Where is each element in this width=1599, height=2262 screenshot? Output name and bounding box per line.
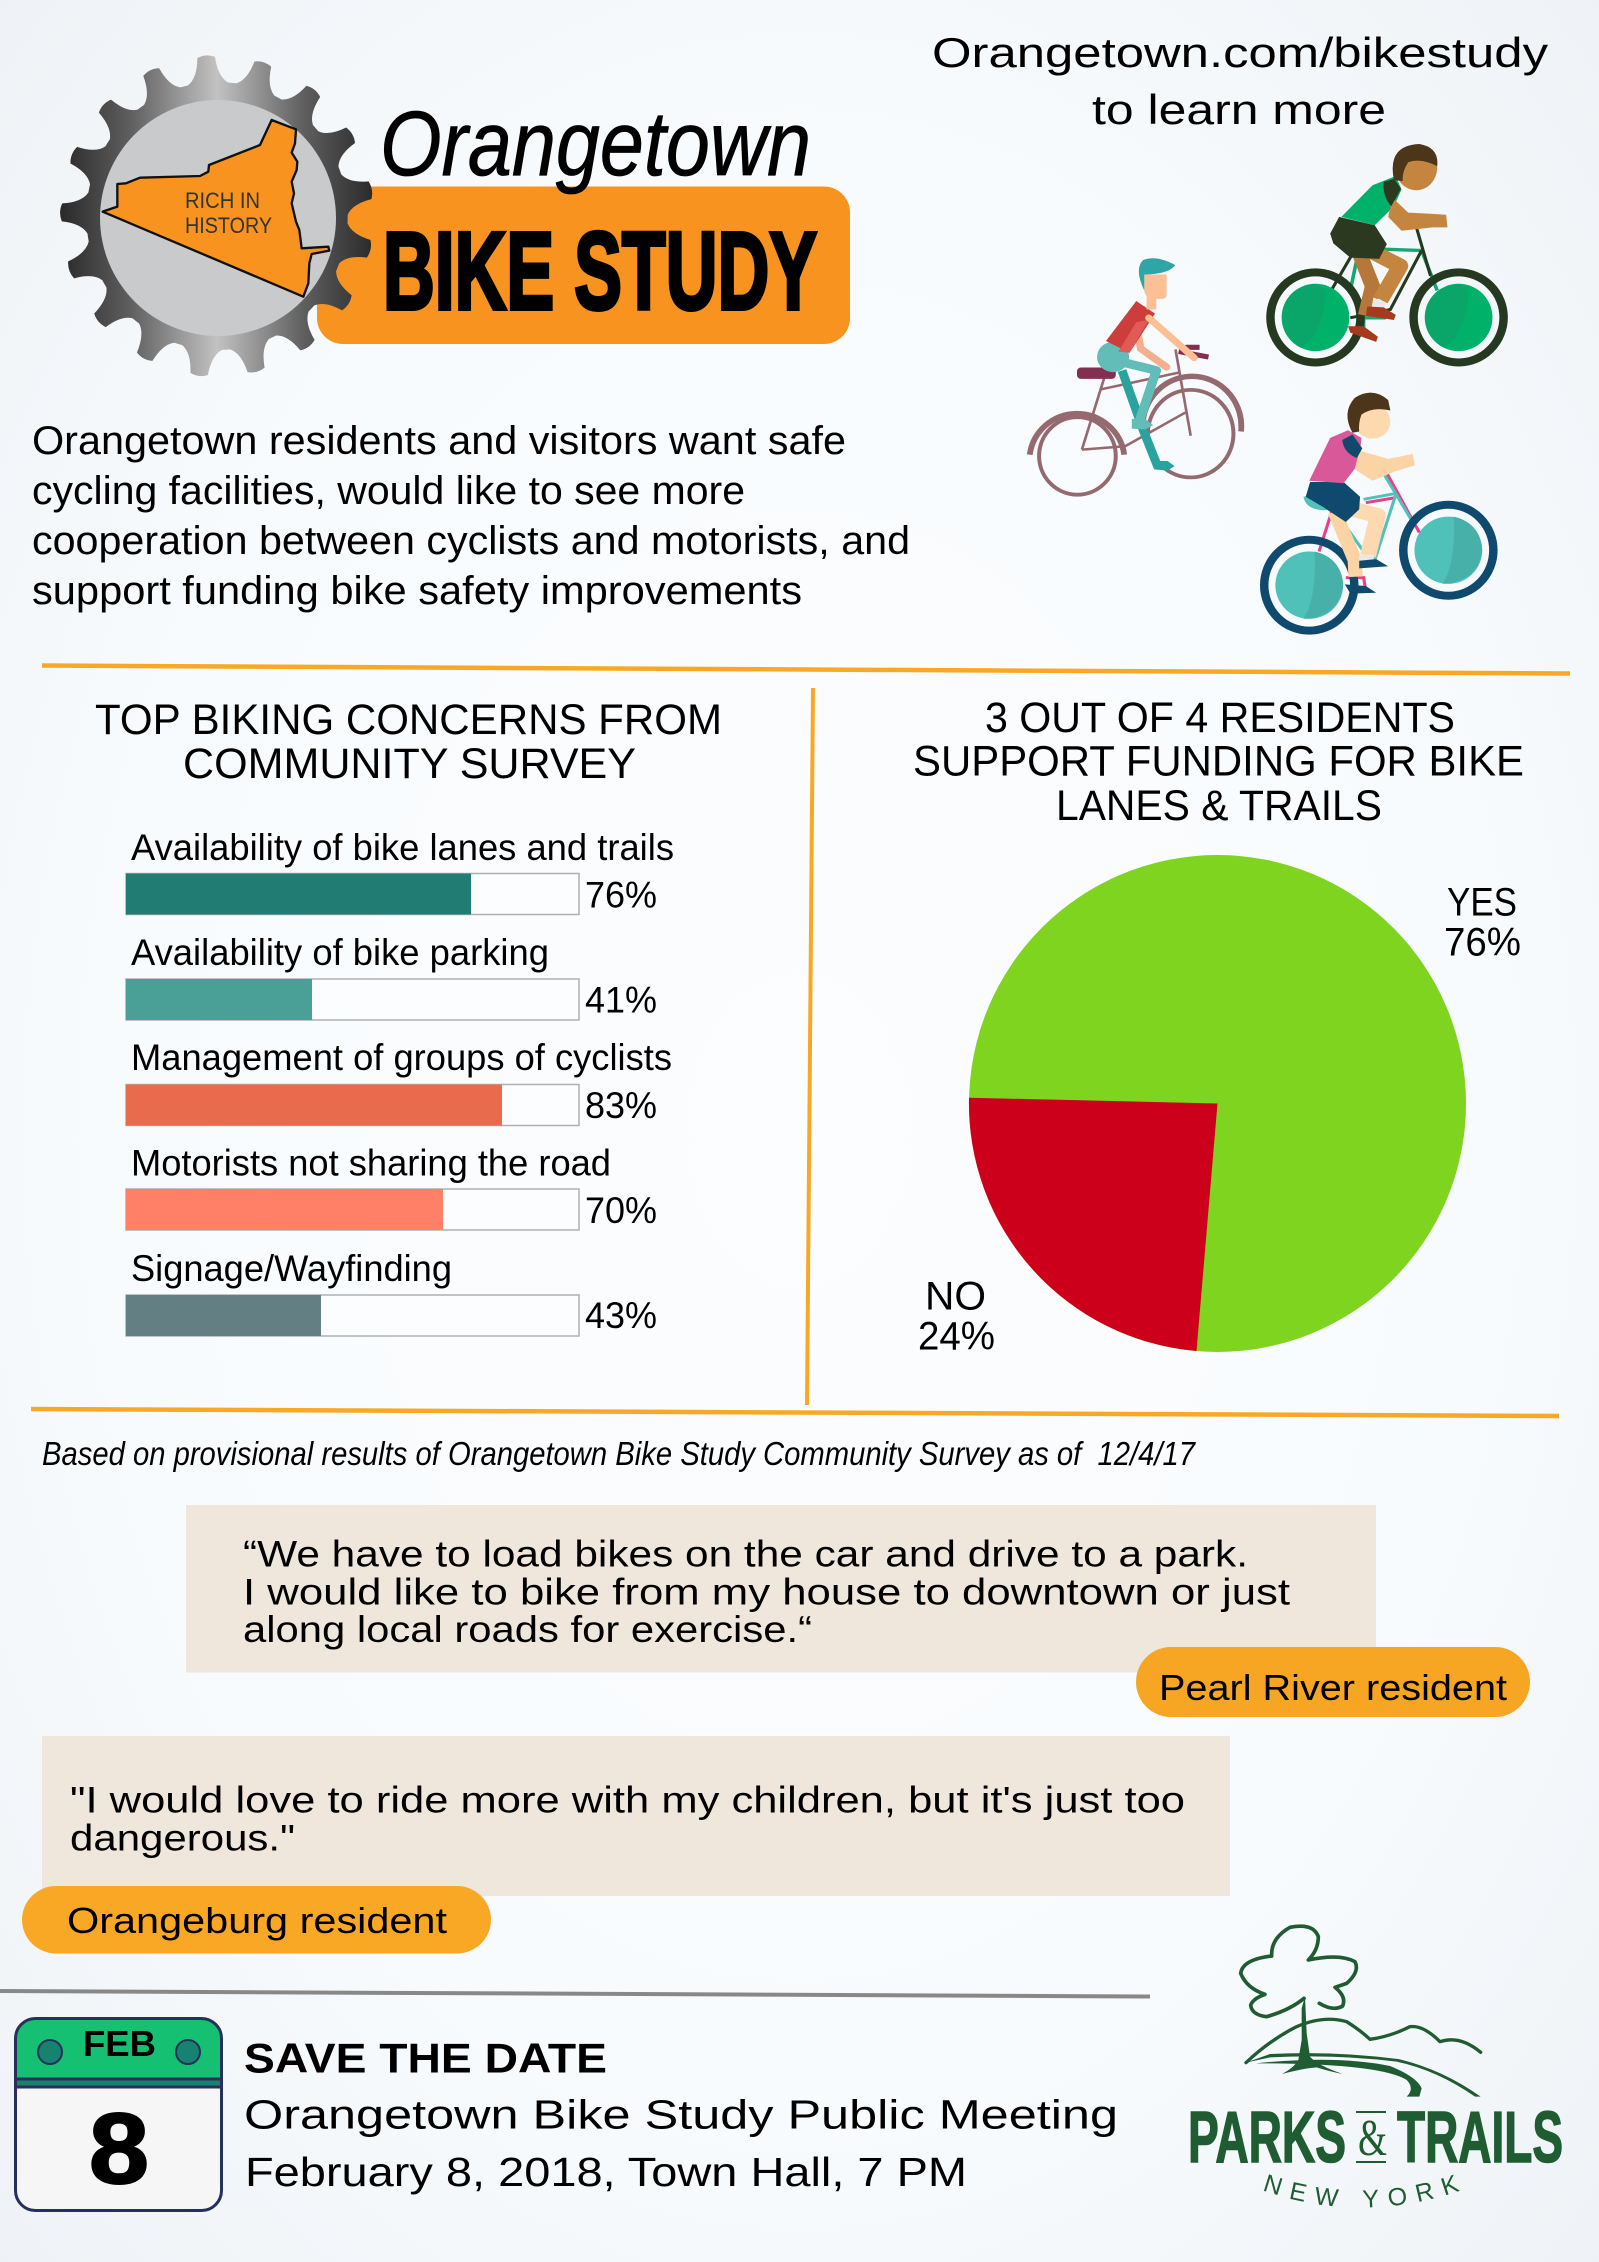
map label: HISTORY — [185, 213, 272, 238]
heading: 3 out of 4 residents: LANES & TRAILS — [1056, 782, 1382, 830]
wordmark: & — [1358, 2110, 1387, 2167]
pie label: no: NO — [925, 1274, 986, 1318]
icon: cyclist in pink shirt — [1264, 393, 1493, 631]
heading: top biking concerns — [95, 696, 722, 788]
attribution pill: Pearl River resident — [1159, 1667, 1507, 1708]
pie label: no — [918, 1274, 995, 1358]
save the date text: Orangetown Bike Study Public Meeting — [244, 2092, 1118, 2138]
panel: biking concerns — [95, 696, 722, 1336]
bar: bike lanes and trails 76%: 76% — [585, 874, 657, 916]
bar: signage 43%: 43% — [585, 1295, 657, 1336]
footnote: Based on provisional results of Orangetown Bike Study Community Survey as of 12/4/17 — [42, 1435, 1196, 1472]
banner heading: BIKE STUDY: BIKE STUDY — [383, 210, 817, 333]
pie chart — [969, 855, 1466, 1352]
link text: Orangetown.com/bikestudy — [932, 29, 1548, 76]
attribution pill: Orangeburg resident — [67, 1900, 447, 1941]
heading: 3 out of 4 residents — [913, 694, 1524, 830]
quote: Pearl River resident — [186, 1505, 1530, 1717]
logo title: Orangetown: Orangetown — [380, 93, 811, 195]
bar: signage 43% — [126, 1248, 657, 1336]
attribution pill — [22, 1886, 491, 1954]
icon: cyclist in red shirt — [1030, 258, 1241, 495]
wordmark: PARKS — [1188, 2098, 1346, 2178]
heading: top biking concerns: COMMUNITY SURVEY — [183, 740, 636, 788]
panel: funding support — [913, 694, 1524, 1358]
heading: 3 out of 4 residents: SUPPORT FUNDING FOR BIKE — [913, 738, 1524, 786]
bar: groups of cyclists 83%: Management of groups of cyclists — [131, 1037, 672, 1078]
icon: calendar February 8: FEB — [83, 2023, 156, 2064]
intro text: Orangetown residents and visitors want safe — [32, 419, 846, 463]
link text: to learn more — [1092, 86, 1386, 133]
cyclists illustration — [1030, 144, 1504, 631]
icon: New York state map — [103, 120, 329, 297]
save the date text: February 8, 2018, Town Hall, 7 PM — [245, 2149, 967, 2195]
quote: Pearl River resident: along local roads for exercise.“ — [243, 1609, 812, 1650]
quote: Orangeburg resident: dangerous." — [70, 1818, 295, 1858]
attribution pill — [1136, 1647, 1530, 1717]
orange banner — [317, 186, 850, 344]
quote: Pearl River resident: I would like to bike from my house to downtown or just — [243, 1572, 1291, 1612]
icon: tree and trail — [1241, 1926, 1481, 2097]
pie label: yes — [1444, 880, 1521, 964]
heading: top biking concerns: TOP BIKING CONCERNS FROM — [95, 696, 722, 744]
wordmark: NEW YORK — [1264, 2174, 1460, 2208]
intro text: support funding bike safety improvements — [32, 569, 802, 613]
pie label: yes: YES — [1447, 880, 1517, 924]
quote: Pearl River resident: “We have to load bikes on the car and drive to a park. — [243, 1534, 1248, 1574]
logo: Parks & Trails New York — [1188, 1924, 1563, 2208]
intro text — [32, 419, 910, 613]
icon: cyclist in green shirt — [1270, 144, 1504, 362]
quote: Orangeburg resident: "I would love to ride more with my children, but it's just too — [70, 1780, 1185, 1820]
bar: bike lanes and trails 76%: Availability of bike lanes and trails — [131, 827, 674, 868]
link text — [932, 29, 1548, 133]
quote: Orangeburg resident — [22, 1736, 1230, 1954]
map label: RICH IN — [185, 188, 260, 213]
bar: bike parking 41%: Availability of bike parking — [131, 932, 549, 973]
bar: bike parking 41% — [126, 932, 657, 1020]
icon: calendar February 8: 8 — [89, 2093, 149, 2205]
bar: motorists not sharing 70%: 70% — [585, 1190, 657, 1231]
save the date text: SAVE THE DATE — [244, 2034, 607, 2082]
icon: steel gear — [54, 48, 381, 383]
intro text: cycling facilities, would like to see more — [32, 469, 745, 513]
wordmark — [1188, 2098, 1563, 2208]
save the date text — [244, 2034, 1118, 2195]
bar: motorists not sharing 70%: Motorists not sharing the road — [131, 1142, 611, 1184]
heading: 3 out of 4 residents: 3 OUT OF 4 RESIDENTS — [985, 694, 1455, 742]
logo: Orangetown Bike Study — [54, 48, 850, 383]
intro text: cooperation between cyclists and motorists, and — [32, 519, 910, 563]
bar: bike lanes and trails 76% — [126, 827, 674, 916]
bar: groups of cyclists 83%: 83% — [585, 1085, 657, 1126]
bar: signage 43%: Signage/Wayfinding — [131, 1248, 452, 1289]
bar: bike parking 41%: 41% — [585, 980, 657, 1020]
pie label: no: 24% — [918, 1314, 995, 1358]
bar: groups of cyclists 83% — [126, 1037, 672, 1126]
bar: motorists not sharing 70% — [126, 1142, 657, 1231]
pie label: yes: 76% — [1444, 920, 1521, 964]
icon: calendar February 8 — [16, 2018, 222, 2210]
map label — [185, 188, 272, 238]
